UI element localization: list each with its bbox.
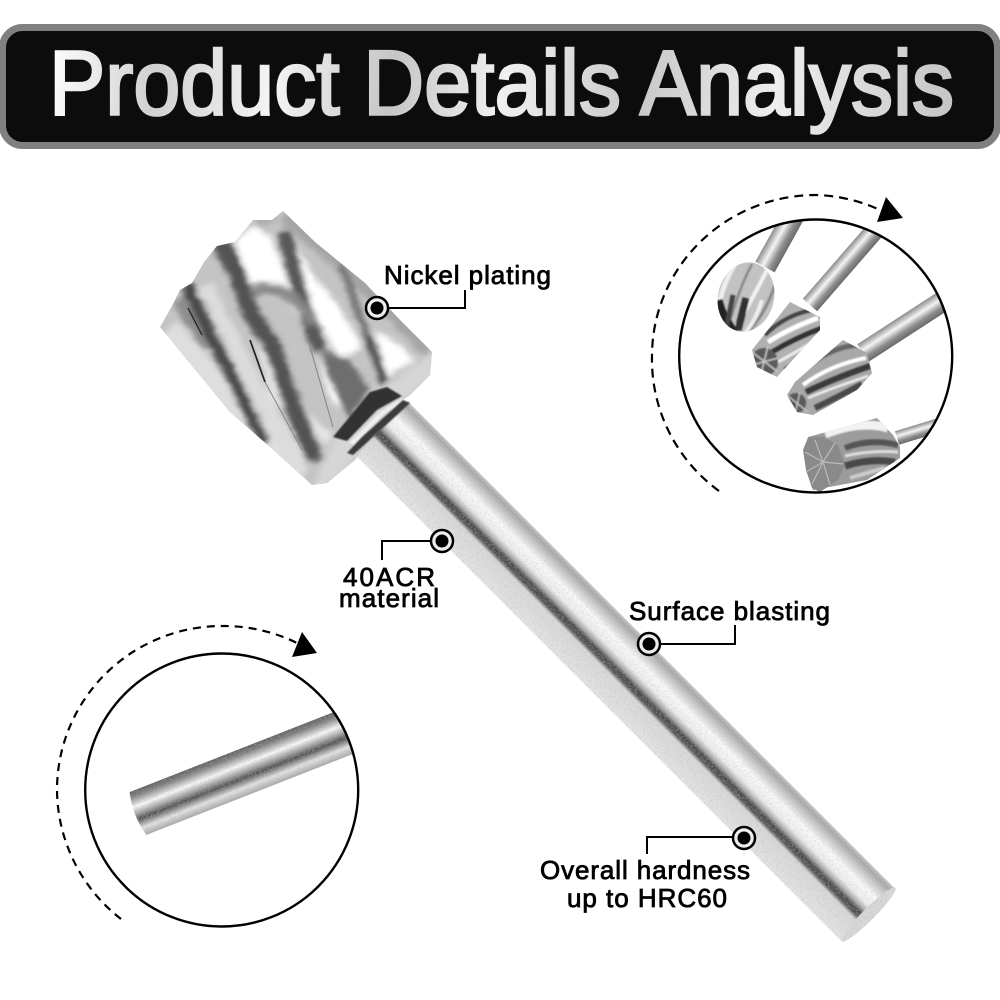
bur collar ring xyxy=(333,387,410,455)
callout: surface blasting xyxy=(629,596,830,655)
bur cutting head xyxy=(160,211,436,490)
bur shaft xyxy=(355,401,900,946)
detail circle outline xyxy=(85,654,358,926)
end flange xyxy=(314,354,432,484)
panel: bur set detail circle xyxy=(652,195,953,492)
callout: 40ACR material: material xyxy=(339,583,439,613)
callout: overall hardness: Overall hardness xyxy=(540,855,750,885)
main bur product image xyxy=(160,211,900,946)
dashed rotation arc xyxy=(652,195,880,491)
callout: 40ACR material: 40ACR xyxy=(343,562,435,592)
callout: surface blasting: Surface blasting xyxy=(629,596,830,626)
dashed rotation arc xyxy=(57,626,297,919)
burs inside circle xyxy=(718,221,944,492)
arrow head xyxy=(292,632,317,657)
creases xyxy=(188,308,333,450)
detail circle outline xyxy=(679,220,952,492)
callout: 40ACR material xyxy=(339,530,453,613)
callout: overall hardness: up to HRC60 xyxy=(567,883,727,913)
bur 2: cylinder xyxy=(750,223,883,378)
callout: overall hardness xyxy=(540,827,755,913)
callout: nickel plating xyxy=(366,260,551,319)
white patches xyxy=(235,225,415,410)
title banner xyxy=(2,28,998,146)
bur 1: oval xyxy=(718,221,803,332)
arrow head xyxy=(877,197,903,222)
bur 3: ball-nose cylinder xyxy=(786,290,953,415)
panel: shank detail circle xyxy=(57,626,388,926)
shading bands xyxy=(168,215,436,490)
dark bands xyxy=(188,238,384,453)
bur 4: end-face cylinder xyxy=(803,418,936,492)
light bands xyxy=(168,215,430,478)
callout: nickel plating: Nickel plating xyxy=(384,260,551,290)
polished rod xyxy=(129,712,352,835)
